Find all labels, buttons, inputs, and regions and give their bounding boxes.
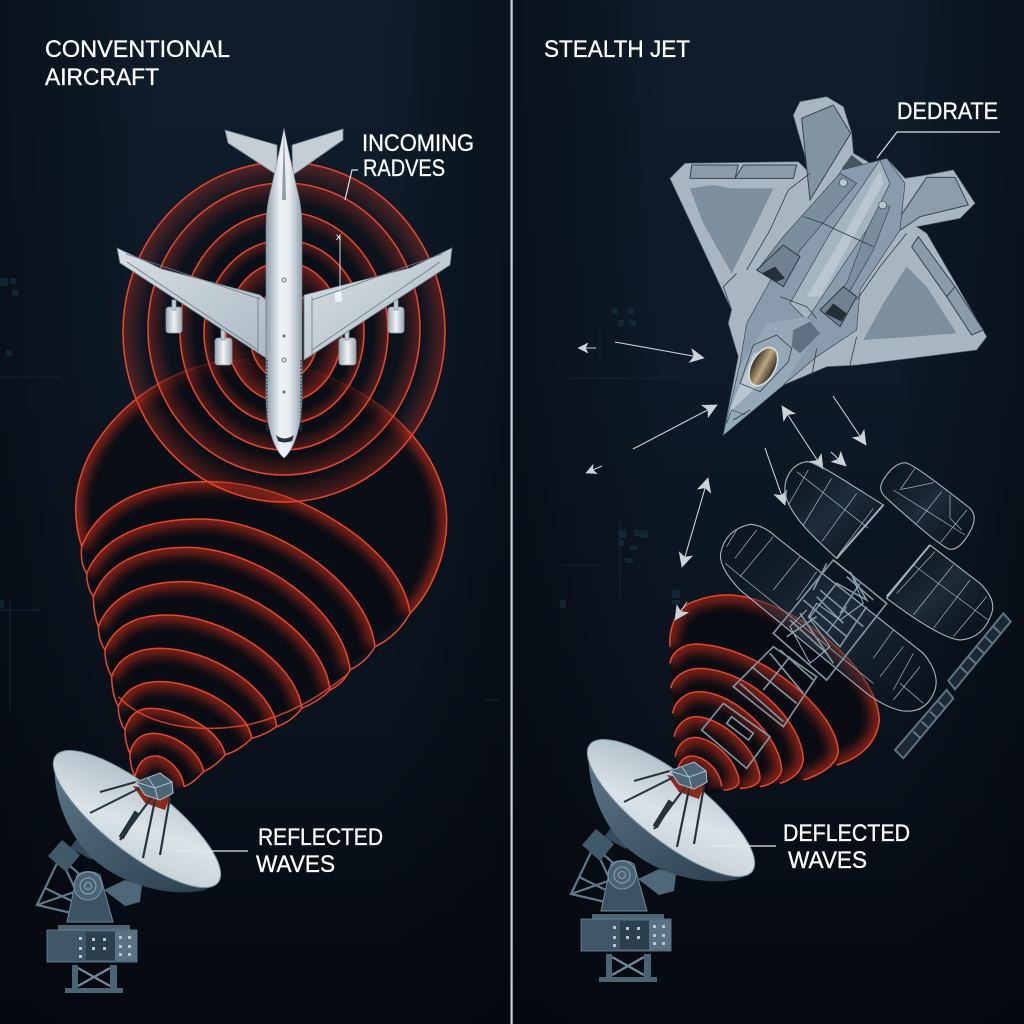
panel divider [510,0,513,1024]
wireframe aircraft [702,462,1011,768]
tailplane [225,130,277,175]
label: reflected waves: WAVES [256,851,335,878]
cockpit canopy [743,343,784,391]
panel: stealth jet [544,36,1011,982]
wireframe right pod [887,545,993,640]
annotation marker on wing [335,232,342,302]
wireframe nose box [702,703,770,768]
engines [166,300,404,365]
label: incoming radves [345,130,474,200]
wireframe long pod [720,524,936,711]
wing panels [690,185,773,273]
label: deflected waves: WAVES [788,847,867,874]
radar dish, right [570,719,772,982]
panel lines [723,173,907,420]
heading: stealth jet: STEALTH JET [544,36,690,63]
heading: conventional aircraft: CONVENTIONAL [45,36,230,63]
label: dedrate: DEDRATE [897,98,998,125]
reflected wave stack [76,360,447,795]
deflection arrows [578,342,866,620]
label: deflected waves [710,820,910,874]
nozzles [842,155,867,180]
incoming radar rings [123,162,445,502]
wireframe lower truss [733,647,817,727]
deflected wave stack [670,595,879,797]
airliner [117,128,452,458]
annotation marker on wing: x [336,232,341,243]
tail fins [802,105,851,200]
label: reflected waves [174,824,383,878]
airframe outline [670,97,987,435]
wireframe small pod [881,463,974,549]
label: reflected waves: REFLECTED [258,824,383,851]
stealth fighter jet [670,97,987,435]
label: incoming radves: INCOMING [362,130,474,157]
wings [117,248,266,358]
fuselage [266,128,302,458]
fuselage [723,158,905,435]
wireframe upper pod [785,462,883,558]
intakes [757,245,800,287]
wireframe ladders [948,613,1011,689]
label: deflected waves: DEFLECTED [783,820,910,847]
panel: conventional aircraft [36,36,474,993]
heading: conventional aircraft: AIRCRAFT [45,64,159,91]
label: dedrate [877,98,1000,158]
wireframe central truss [773,560,887,680]
radar dish, left [36,730,238,993]
label: incoming radves: RADVES [363,155,445,182]
